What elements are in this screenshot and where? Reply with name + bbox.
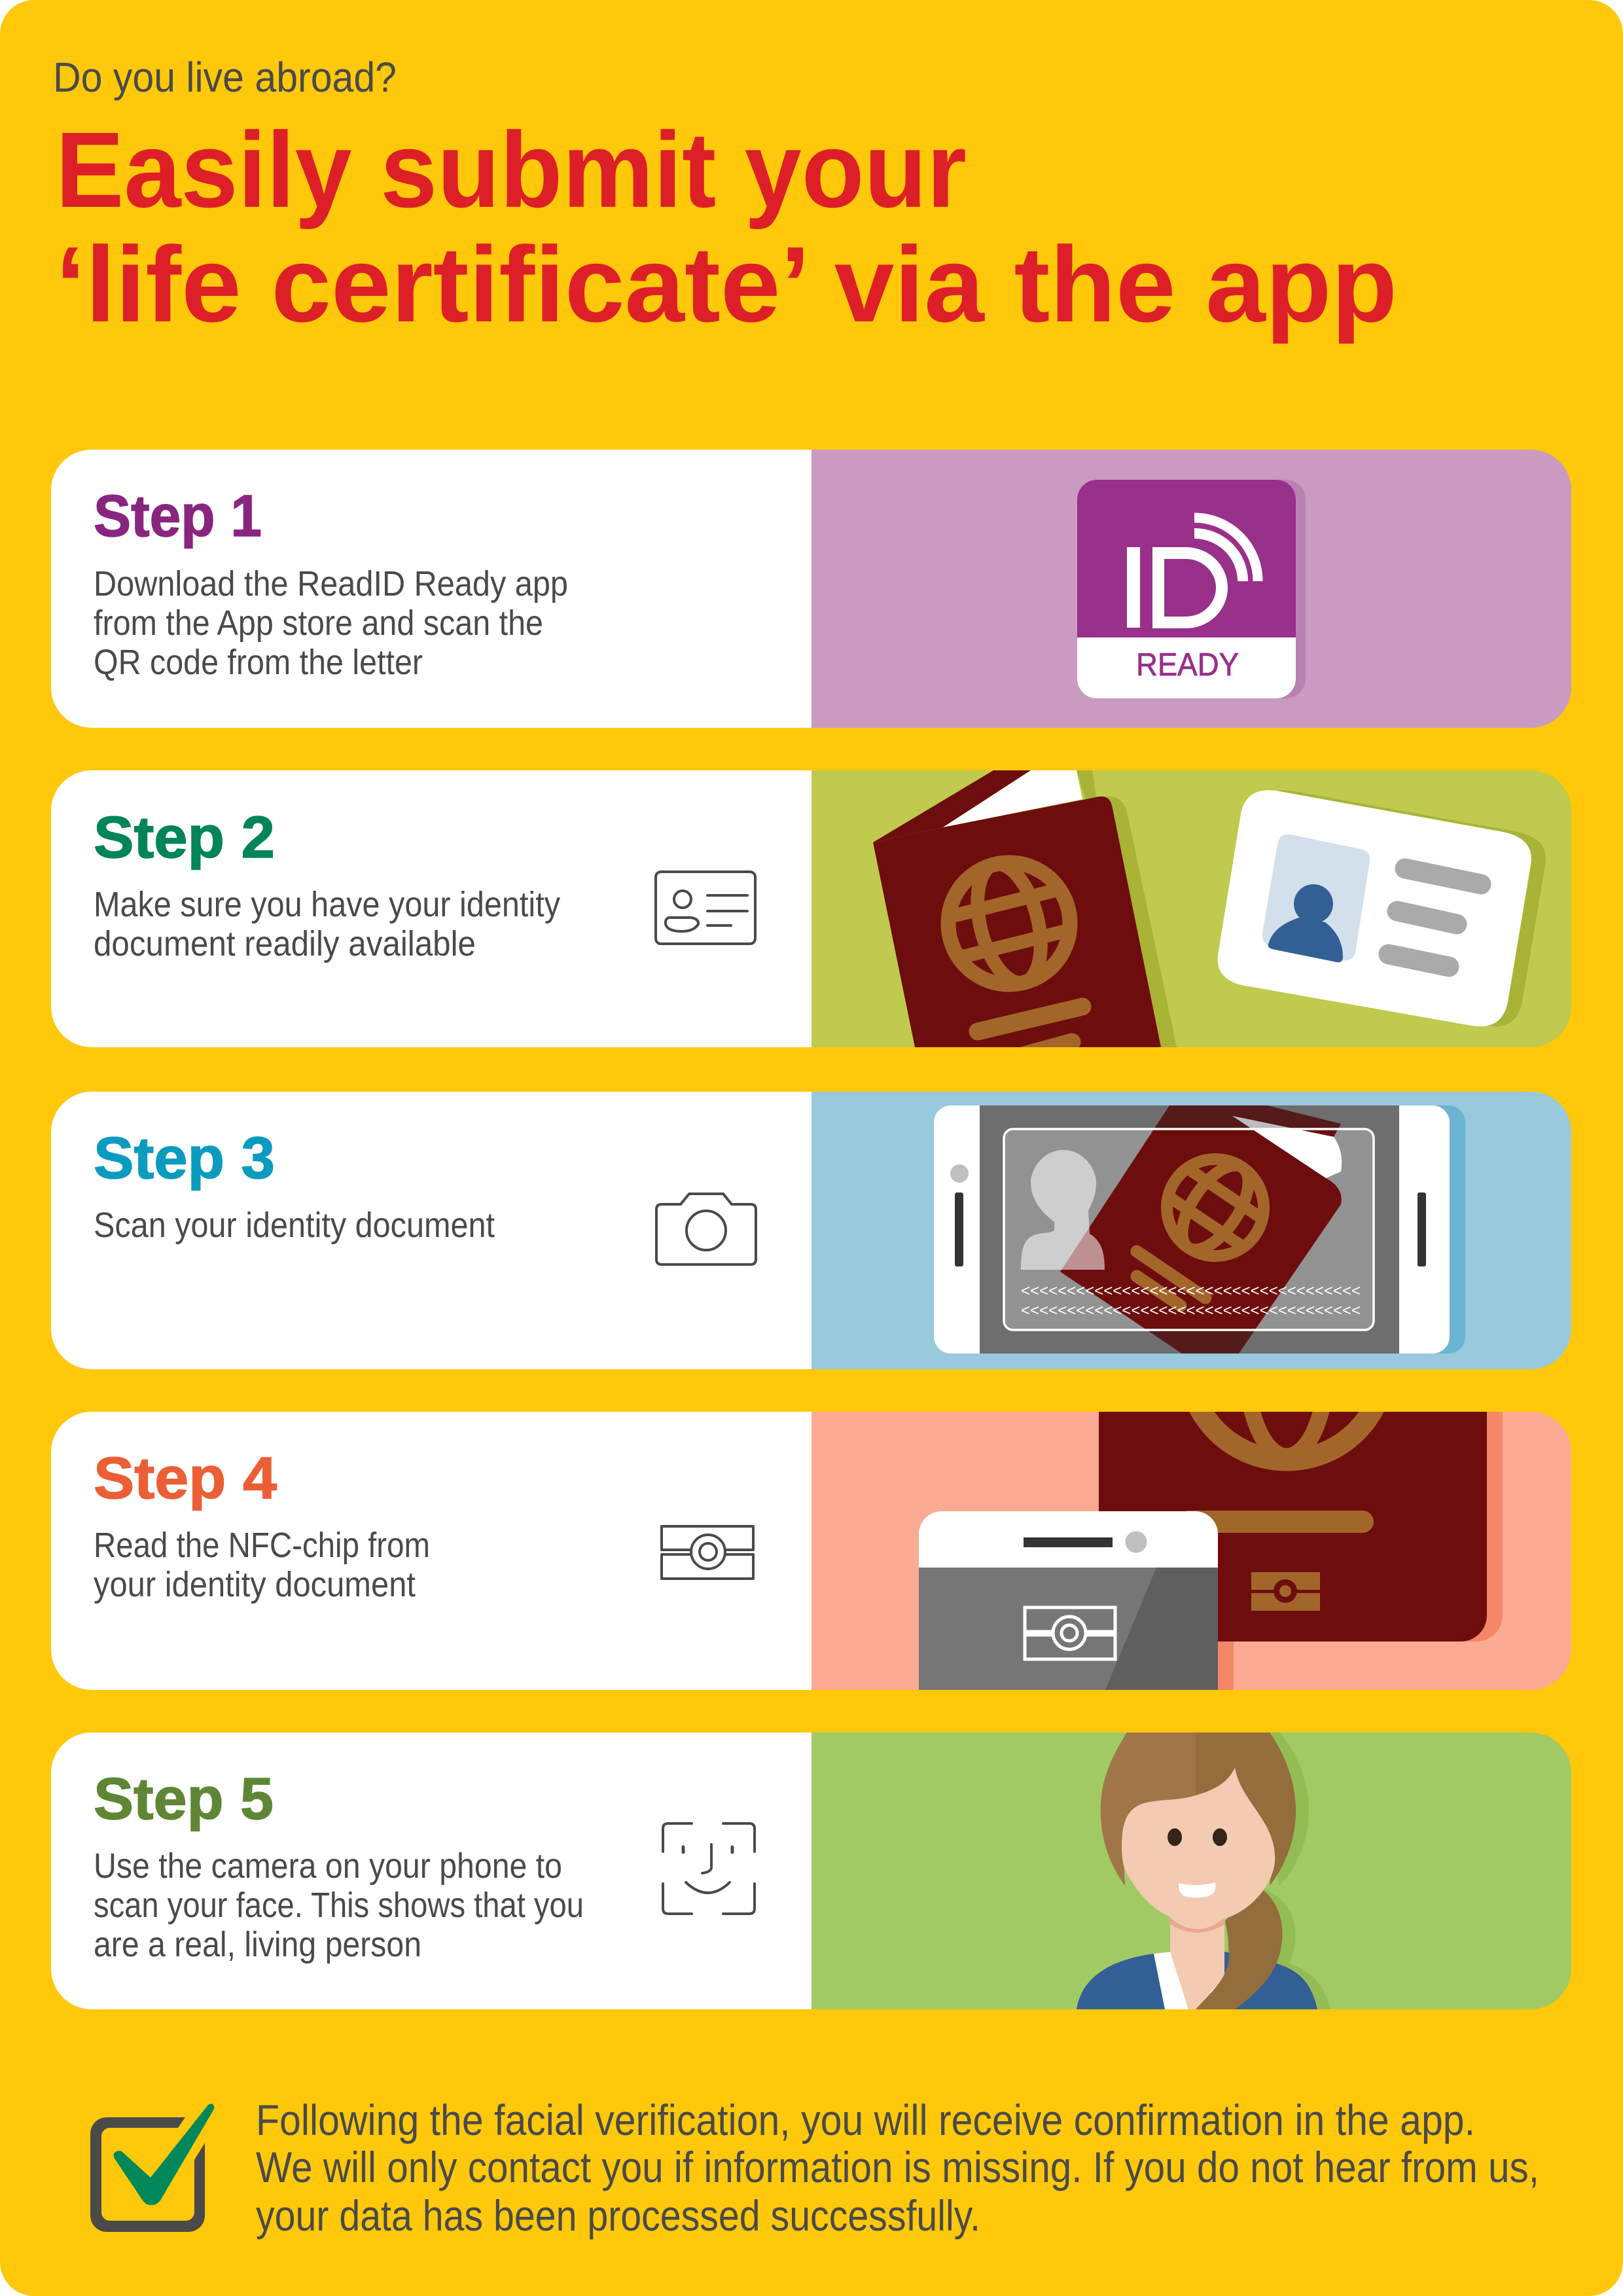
step 1 heading: Step 1 [94,484,262,549]
step 2 text: Make sure you have your identity [94,885,560,924]
panel: step 1 [51,450,1571,728]
step 5 text: Use the camera on your phone to [94,1846,562,1886]
panel: step 3 [51,1092,1571,1369]
step 5 text: scan your face. This shows that you [94,1886,584,1925]
illustration: phone reading chip [919,1511,1218,1690]
step 2 heading: Step 2 [94,805,275,870]
icon: camera outline [656,1194,756,1265]
step 1 text: from the App store and scan the [94,603,543,643]
icon: face scan outline [663,1823,755,1914]
eyebrow: Do you live abroad? [53,54,397,101]
panel: step 4 [51,1412,1571,1690]
illustration: passport with chip [1099,1412,1503,1690]
illustration: phone scanning passport [934,1105,1465,1354]
machine readable zone: <<<<<<<<<<<<<<<<<<<<<<<<<<<<<<<<<<<<< [1021,1282,1361,1300]
title: Easily submit your [56,110,967,230]
illustration: id card [1218,790,1546,1026]
step 2 text [94,885,560,963]
machine readable zone: <<<<<<<<<<<<<<<<<<<<<<<<<<<<<<<<<<<<< [1021,1302,1361,1319]
step 3 text: Scan your identity document [94,1206,495,1245]
step 2 text: document readily available [94,924,476,963]
icon: id card outline [656,872,755,944]
step 5 text: are a real, living person [94,1925,421,1964]
footer text: Following the facial verification, you will receive confirmation in the app. [256,2096,1475,2144]
icon: check box [90,2104,214,2232]
footer text: your data has been processed successfully. [256,2191,980,2240]
step 4 heading: Step 4 [94,1446,277,1511]
step 1 text: QR code from the letter [94,643,423,682]
step 4 text: your identity document [94,1565,416,1604]
icon: chip outline [662,1526,753,1579]
step 5 text [94,1846,584,1964]
title: ‘life certificate’ via the app [56,224,1397,344]
title [56,110,1397,344]
illustration: passport [873,770,1177,1055]
panel: step 5 [51,1732,1571,2009]
machine readable zone [1021,1282,1361,1319]
panel: step 2 [51,770,1571,1055]
step 4 text [94,1526,430,1604]
footer text [256,2096,1539,2240]
step 1 text: Download the ReadID Ready app [94,564,568,603]
illustration: woman [1077,1732,1330,2009]
icon: ReadID Ready app [1077,480,1306,698]
icon: ReadID Ready app: READY [1136,647,1239,683]
step 3 heading: Step 3 [94,1126,275,1191]
step 4 text: Read the NFC-chip from [94,1526,430,1565]
step 5 heading: Step 5 [94,1767,274,1832]
step 1 text [94,564,568,682]
